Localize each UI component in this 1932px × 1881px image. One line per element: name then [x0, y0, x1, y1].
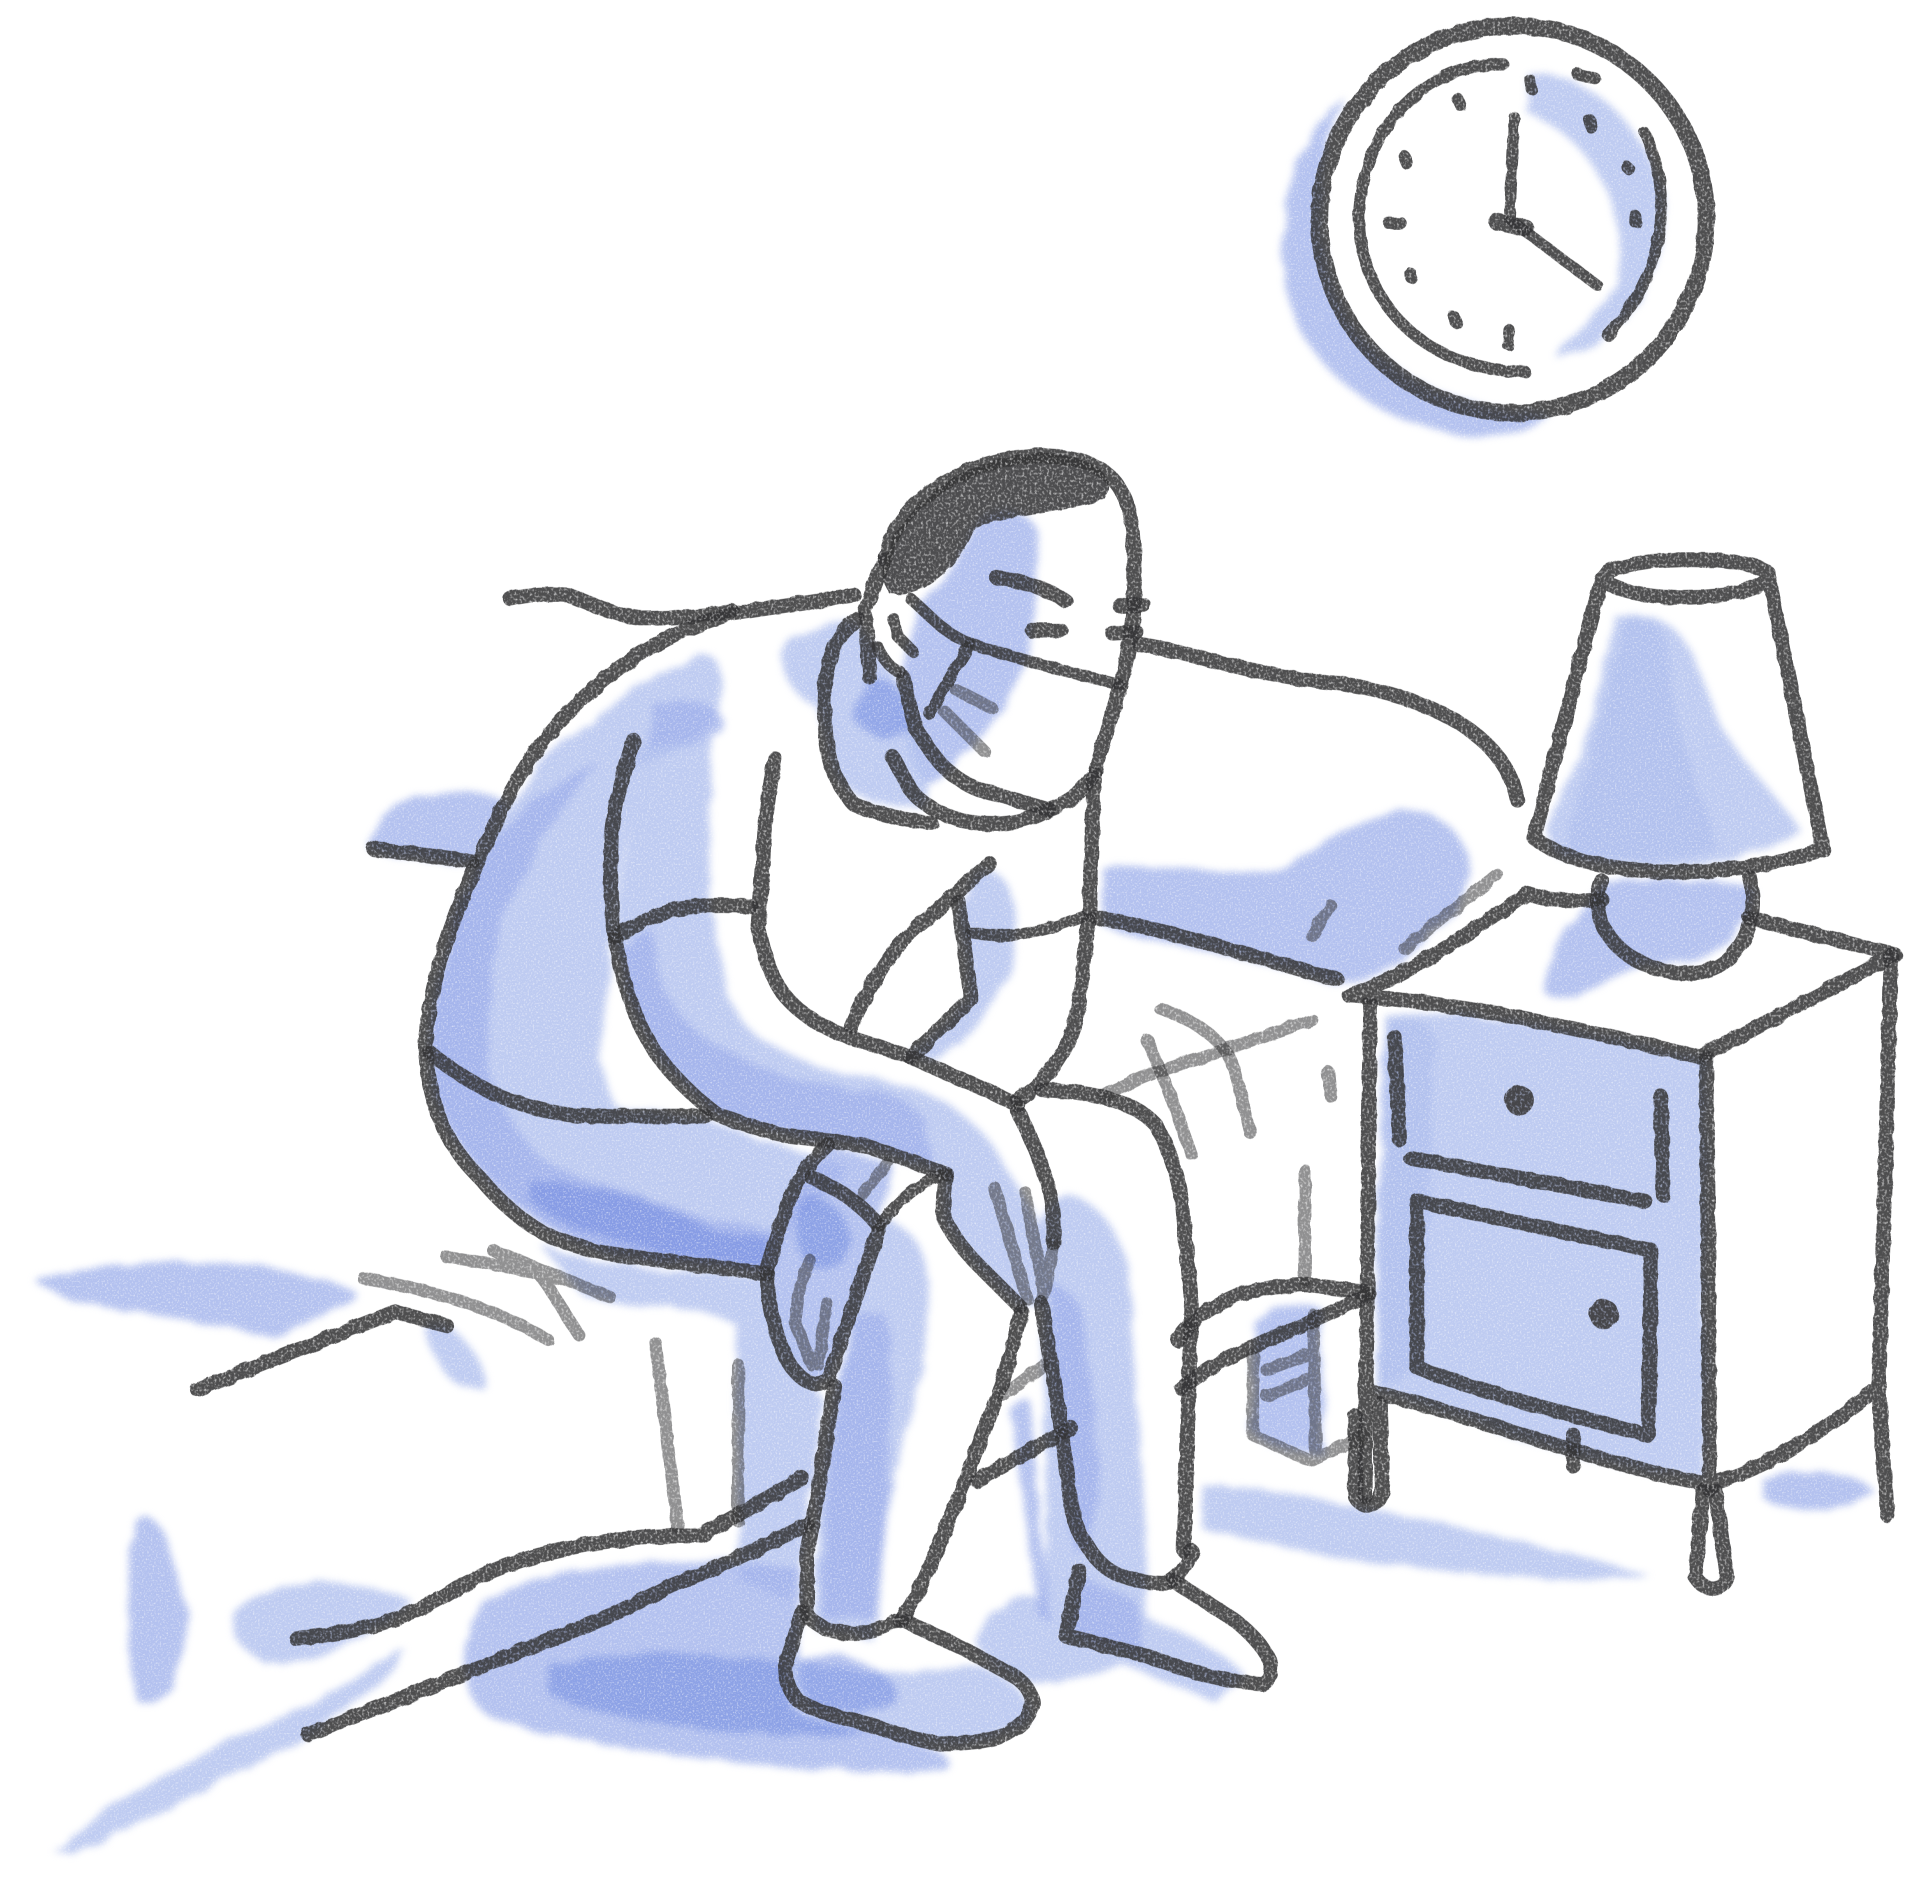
wash: back leg light — [977, 1196, 1244, 1701]
chest line — [851, 864, 989, 1026]
wash: strip between legs — [1010, 1401, 1050, 1621]
thin post — [1300, 1170, 1310, 1280]
ear — [877, 618, 913, 673]
wash: lamp shade — [1565, 618, 1719, 862]
floor line between legs — [977, 1428, 1071, 1481]
wash: nightstand front — [1376, 1013, 1706, 1478]
wash: under-thigh — [543, 1248, 823, 1601]
wash: front shoe — [789, 1657, 1029, 1746]
bed frame right lower — [1182, 1295, 1369, 1388]
wash: bed spot — [425, 1323, 484, 1388]
wash: bed left — [35, 1262, 357, 1337]
wash: floor stroke left — [127, 1517, 187, 1706]
wash: slippers — [1251, 1305, 1324, 1454]
nightstand top — [1349, 893, 1895, 1057]
wash: shin light — [813, 1220, 928, 1638]
wash: floor smear — [56, 1582, 413, 1854]
wash: floor spot right — [1762, 1472, 1873, 1510]
wash: face — [901, 512, 1038, 786]
wash: back leg mid — [1049, 1285, 1102, 1552]
front hand — [943, 1174, 1020, 1307]
back leg outer — [1042, 1090, 1191, 1551]
bed edge left — [197, 1312, 446, 1390]
wash: far blanket — [1103, 811, 1470, 985]
headboard stub — [373, 849, 472, 861]
wash: clock face shade — [1528, 74, 1664, 360]
mattress creases — [1147, 1009, 1331, 1154]
drawer knobs — [1504, 1085, 1619, 1329]
lamp shade — [1534, 560, 1823, 872]
floor line upper — [296, 1478, 802, 1638]
headboard right — [1140, 644, 1518, 801]
back foot — [1066, 1571, 1271, 1684]
inner arm — [758, 759, 1018, 1105]
wash: sleeve and knee hand — [766, 1146, 893, 1383]
clock inner rim — [1359, 64, 1525, 372]
floor line lower — [308, 1525, 807, 1734]
mask top — [911, 599, 1120, 685]
upper drawer — [1395, 1037, 1663, 1201]
clock — [1320, 26, 1706, 413]
clock inner rim right — [1608, 133, 1661, 335]
slippers box — [1253, 1316, 1365, 1461]
clock outer ring — [1320, 26, 1706, 413]
wash: chest and hand — [909, 871, 1017, 1059]
sheet creases — [364, 1250, 610, 1340]
front foot — [785, 1611, 1033, 1743]
neck and collar — [824, 618, 932, 823]
lower drawer — [1417, 1201, 1651, 1435]
wash: floor under nightstand — [1201, 1484, 1651, 1580]
front shin — [807, 1386, 896, 1633]
man — [425, 453, 1271, 1743]
back — [425, 595, 854, 1274]
bed — [197, 594, 1518, 1734]
wash: neck — [782, 622, 928, 807]
blanket folds — [1312, 875, 1497, 949]
clock hub — [1497, 222, 1525, 228]
outer sleeve and arm — [611, 740, 946, 1174]
wash: shin dark — [821, 1316, 892, 1621]
clock hands — [1509, 117, 1598, 286]
wash: arm dark strip — [620, 928, 932, 1164]
wash: darkest thigh shade — [530, 1182, 770, 1269]
nightstand — [1349, 893, 1895, 1588]
wash: back dark strip — [430, 761, 782, 1274]
head outline — [885, 456, 1135, 824]
mask pleats — [929, 644, 970, 713]
wash: clock shadow — [1282, 99, 1547, 437]
shirt waist line — [971, 916, 1084, 936]
wash: headboard left — [370, 793, 508, 865]
knee-hand fingers — [796, 1260, 827, 1365]
sleeve end — [882, 1175, 941, 1221]
knee hand — [766, 1144, 879, 1384]
waist line — [429, 1052, 706, 1116]
headboard left — [510, 594, 732, 618]
wash: dark floor shadow — [548, 1654, 887, 1735]
wash: back foot dark — [1071, 1576, 1142, 1657]
blanket edge — [1097, 918, 1337, 979]
sleeve stripe — [863, 1163, 887, 1195]
hand cuff — [812, 1178, 879, 1226]
nightstand body — [1365, 955, 1891, 1515]
eyes and brows — [997, 578, 1143, 633]
hair — [882, 453, 1109, 594]
mattress edge right — [1104, 1020, 1312, 1095]
wash: shoulder blob — [647, 700, 722, 758]
wash: back and thigh — [430, 653, 850, 1274]
wash: lamp base — [1546, 878, 1756, 1001]
clock hour marks — [1389, 74, 1636, 345]
mask pleats lower — [944, 690, 992, 751]
sleeve hem — [615, 905, 752, 937]
wash: floor under man — [464, 1562, 948, 1770]
inner shin — [901, 1311, 1021, 1621]
wash: lamp shade light — [1548, 615, 1801, 866]
shirt right side — [1018, 774, 1094, 1100]
nightstand legs — [1355, 1404, 1727, 1588]
wash: neck shadow — [854, 680, 911, 737]
back leg inner — [1041, 1303, 1191, 1583]
forearm — [1018, 1111, 1054, 1243]
mask edge — [903, 678, 1049, 809]
fingers of front hand — [994, 1187, 1053, 1300]
wash: knee dark — [797, 1198, 850, 1269]
lamp — [1534, 560, 1823, 973]
lamp base — [1597, 877, 1753, 973]
head left side — [865, 559, 885, 678]
bed frame right — [1178, 1285, 1365, 1340]
bed supports — [656, 1343, 738, 1527]
wash: nightstand shading — [1377, 1020, 1435, 1386]
wash: front shoe dark — [799, 1655, 897, 1714]
short line between legs — [1003, 1365, 1044, 1396]
chest fold — [911, 902, 971, 1057]
wash: arm — [615, 739, 1044, 1306]
